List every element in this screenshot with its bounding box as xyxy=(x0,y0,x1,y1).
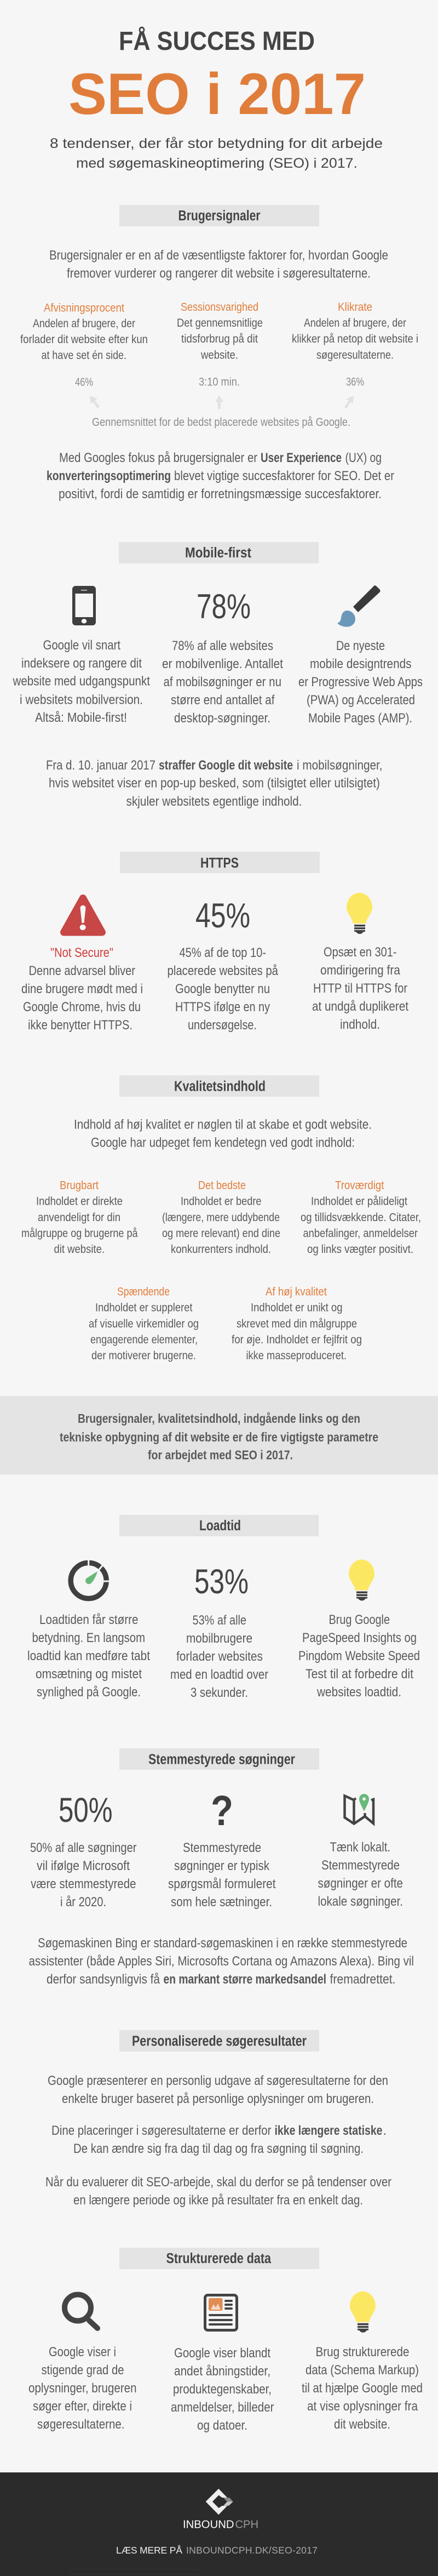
column: design trends: mobile designtrends xyxy=(310,657,412,671)
column: 50% text: i år 2020. xyxy=(60,1895,106,1910)
column: Brugbart xyxy=(21,1178,138,1256)
paragraph: UX: (UX) og xyxy=(345,451,382,465)
icon: warning triangle xyxy=(64,898,102,932)
column: Spændende: af visuelle virkemidler og xyxy=(89,1317,199,1330)
column: search text: oplysninger, brugeren xyxy=(28,2381,137,2396)
paragraph: pop-up: Fra d. 10. januar 2017 xyxy=(46,758,155,773)
value: 46%: 46% xyxy=(75,375,93,389)
icon: paint brush xyxy=(337,585,380,627)
icon: rich result document xyxy=(205,2295,237,2330)
column: 78% text: af mobilsøgninger er nu xyxy=(163,675,281,689)
column: Sessionsvarighed: Det gennemsnitlige xyxy=(177,316,263,329)
column: question text xyxy=(168,1840,276,1910)
paragraph: personlig udgave: Google præsenterer en personlig udgave af søgeresultaterne for den xyxy=(48,2073,388,2088)
column: design trends: (PWA) og Accelerated xyxy=(307,693,415,708)
column: Brugbart: anvendeligt for din xyxy=(38,1211,120,1224)
column: 53% text xyxy=(170,1613,268,1700)
section: Mobile-first xyxy=(13,542,423,809)
column: loadtid text: loadtid kan medføre tabt xyxy=(27,1649,150,1663)
column: 45% text: placerede websites på xyxy=(168,964,279,978)
logo wordmark xyxy=(183,2519,258,2531)
column: Det bedste: og mere relevant) end dine xyxy=(162,1227,280,1240)
column: 53% text: mobilbrugere xyxy=(186,1631,252,1646)
column: Troværdigt: Troværdigt xyxy=(335,1178,384,1192)
heading: Personaliserede søgeresultater: Personaliserede søgeresultater xyxy=(132,2034,307,2049)
column: Sessionsvarighed: tidsforbrug på dit xyxy=(181,332,258,345)
column: rich result text xyxy=(171,2346,274,2433)
icon: question mark: ? xyxy=(211,1787,233,1834)
column: Klikrate xyxy=(292,300,418,362)
icon: map with pin xyxy=(345,1794,373,1824)
paragraph: Bing xyxy=(28,1936,414,1987)
section: Kvalitetsindhold xyxy=(21,1075,421,1362)
column: loadtid text: Loadtiden får større xyxy=(39,1612,138,1627)
column: Google vil snart: indeksere og rangere dit xyxy=(21,656,142,671)
column: search text: søgeresultaterne. xyxy=(37,2417,125,2432)
paragraph: UX: konverteringsoptimering xyxy=(47,469,171,483)
column: Brugbart: Brugbart xyxy=(60,1178,99,1192)
column: 45% text: Google benytter nu xyxy=(175,982,270,996)
column: Troværdigt xyxy=(301,1178,421,1256)
column: 50% text xyxy=(30,1840,137,1910)
heading: HTTPS: HTTPS xyxy=(200,856,239,871)
column: Troværdigt: anbefalinger, anmeldelser xyxy=(303,1227,418,1240)
column: Google vil snart: i websitets mobilversion. xyxy=(20,692,143,707)
logo wordmark: CPH xyxy=(235,2519,258,2531)
column: loadtid text xyxy=(27,1612,150,1700)
heading: Loadtid: Loadtid xyxy=(199,1518,241,1534)
intro text xyxy=(49,248,388,281)
column: 45% text: 45% af de top 10- xyxy=(180,945,266,960)
column: 50% text: vil ifølge Microsoft xyxy=(37,1859,130,1873)
read more link: INBOUNDCPH.DK/SEO-2017 xyxy=(186,2545,318,2556)
column: Not Secure: "Not Secure" xyxy=(50,945,113,960)
arrow: right xyxy=(342,393,357,410)
column: local text: Stemmestyrede xyxy=(321,1858,400,1873)
column: local text xyxy=(318,1840,403,1909)
column: search text xyxy=(28,2345,137,2432)
column: rich result text: produktegenskaber, xyxy=(173,2382,272,2397)
section: Personaliserede søgeresultater xyxy=(45,2030,391,2208)
stat: 78%: 78% xyxy=(197,588,251,626)
column: Klikrate: Klikrate xyxy=(338,300,372,314)
column: Afvisningsprocent xyxy=(20,301,148,362)
paragraph: ikke statiske xyxy=(51,2123,387,2156)
column: 301 redirect: Opsæt en 301- xyxy=(324,945,396,960)
paragraph: pop-up: skjuler websitets egentlige indhold. xyxy=(126,794,302,809)
column: 301 redirect: indhold. xyxy=(340,1017,380,1032)
paragraph: Bing: derfor sandsynligvis få xyxy=(47,1972,160,1987)
column: Klikrate: klikker på netop dit website i xyxy=(292,332,418,345)
column: Af høj kvalitet: Indholdet er unikt og xyxy=(251,1301,343,1314)
column: loadtid text: betydning. En langsom xyxy=(32,1631,145,1645)
paragraph: ikke statiske: ikke længere statiske xyxy=(275,2123,382,2138)
logo mark xyxy=(206,2489,233,2515)
column: local text: Tænk lokalt. xyxy=(330,1840,390,1855)
column: search text: Google viser i xyxy=(49,2345,116,2360)
heading: Strukturerede data xyxy=(119,2248,319,2269)
column: design trends xyxy=(298,639,423,726)
column: 301 redirect xyxy=(312,945,408,1032)
column: Not Secure: dine brugere mødt med i xyxy=(21,982,143,996)
stat: 50%: 50% xyxy=(59,1791,113,1830)
paragraph: pop-up xyxy=(46,758,382,809)
heading: Strukturerede data: Strukturerede data xyxy=(166,2251,272,2266)
column: Det bedste: konkurrenters indhold. xyxy=(171,1243,271,1256)
column: design trends: De nyeste xyxy=(336,639,385,653)
column: Af høj kvalitet: Af høj kvalitet xyxy=(266,1285,327,1298)
paragraph: Bing: en markant større markedsandel xyxy=(163,1972,326,1987)
icon: light bulb xyxy=(350,2292,376,2333)
column: 78% text: er mobilvenlige. Antallet xyxy=(162,657,283,671)
column: 53% text: 3 sekunder. xyxy=(191,1685,248,1700)
column: 45% text: undersøgelse. xyxy=(188,1018,257,1033)
callout band: tekniske opbygning af dit website er de fire vigtigste parametre xyxy=(60,1430,378,1444)
column: Google vil snart xyxy=(13,638,150,725)
intro text: Google har udpeget fem kendetegn ved godt indhold: xyxy=(91,1136,355,1150)
column: Brugbart: Indholdet er direkte xyxy=(36,1195,123,1208)
callout band xyxy=(0,1396,438,1474)
paragraph: UX: blevet vigtige succesfaktorer for SEO. Det er xyxy=(174,469,394,483)
column: Det bedste: (længere, mere uddybende xyxy=(162,1211,280,1224)
intro text: Indhold af høj kvalitet er nøglen til at skabe et godt website. xyxy=(74,1118,372,1132)
paragraph: pop-up: straffer Google dit website xyxy=(159,758,293,773)
paragraph: personlig udgave: enkelte bruger baseret på personlige oplysninger om brugeren. xyxy=(62,2091,374,2106)
logo wordmark: INBOUND xyxy=(183,2519,234,2531)
column: Troværdigt: Indholdet er pålideligt xyxy=(311,1195,407,1208)
column: Klikrate: Andelen af brugere, der xyxy=(304,316,406,329)
paragraph: Bing: fremadrettet. xyxy=(330,1972,395,1987)
column: Troværdigt: og tillidsvækkende. Citater, xyxy=(301,1211,421,1224)
column: question text: spørgsmål formuleret xyxy=(168,1877,276,1891)
column: question text: Stemmestyrede xyxy=(183,1840,261,1855)
column: schema text: Brug strukturerede xyxy=(315,2345,410,2360)
column: Af høj kvalitet xyxy=(232,1285,362,1362)
column: Det bedste xyxy=(162,1178,280,1256)
column: Not Secure: Google Chrome, hvis du xyxy=(23,1000,141,1015)
column: search text: stigende grad de xyxy=(42,2363,124,2378)
column: Spændende: Spændende xyxy=(117,1285,170,1298)
column: schema text xyxy=(302,2345,423,2432)
stat: 53%: 53% xyxy=(194,1563,249,1601)
column: Google vil snart: Google vil snart xyxy=(43,638,120,653)
column: rich result text: andet åbningstider, xyxy=(174,2364,270,2379)
paragraph: UX: positivt, fordi de samtidig er forretningsmæssige succesfaktorer. xyxy=(59,487,382,501)
column: 301 redirect: omdirigering fra xyxy=(320,963,401,978)
arrow: left xyxy=(87,393,102,410)
paragraph: UX: User Experience xyxy=(261,451,342,465)
column: schema text: dit website. xyxy=(334,2417,390,2432)
column: Af høj kvalitet: skrevet med din målgruppe xyxy=(237,1317,357,1330)
column: rich result text: anmeldelser, billeder xyxy=(171,2400,274,2415)
column: 53% text: 53% af alle xyxy=(193,1613,246,1628)
column: 50% text: 50% af alle søgninger xyxy=(30,1840,137,1855)
icon: light bulb xyxy=(349,1560,374,1600)
intro text: Brugersignaler er en af de væsentligste faktorer for, hvordan Google xyxy=(49,248,388,263)
column: Google vil snart: website med udgangspunkt xyxy=(13,674,150,689)
paragraph: tendenser: en længere periode og ikke på resultater fra en enkelt dag. xyxy=(73,2193,363,2208)
column: loadtid text: omsætning og mistet xyxy=(36,1667,142,1682)
column: Not Secure xyxy=(21,945,143,1033)
column: Google vil snart: Altså: Mobile-first! xyxy=(35,710,127,725)
column: Sessionsvarighed: website. xyxy=(200,349,238,362)
paragraph: ikke statiske: . xyxy=(383,2123,387,2138)
paragraph: UX: Med Googles fokus på brugersignaler er xyxy=(59,451,257,465)
value: 36%: 36% xyxy=(346,375,364,388)
subtitle: med søgemaskineoptimering (SEO) i 2017. xyxy=(76,156,358,171)
column: 78% text: 78% af alle websites xyxy=(172,639,273,653)
read more link: LÆS MERE PÅ xyxy=(116,2545,182,2556)
column: Brugbart: dit website. xyxy=(54,1243,105,1256)
column: Sessionsvarighed xyxy=(177,300,263,362)
column: 53% text: forlader websites xyxy=(176,1649,263,1664)
heading: Mobile-first xyxy=(119,542,319,563)
heading: Brugersignaler: Brugersignaler xyxy=(178,208,261,224)
column: local text: lokale søgninger. xyxy=(318,1894,403,1909)
paragraph: ikke statiske: Dine placeringer i søgeresultaterne er derfor xyxy=(51,2123,272,2138)
stat: 45%: 45% xyxy=(195,897,250,935)
arrow: middle xyxy=(215,395,223,409)
heading: Mobile-first: Mobile-first xyxy=(185,545,251,561)
column: 78% text: større end antallet af xyxy=(171,693,275,708)
column: rich result text: og datoer. xyxy=(197,2418,247,2433)
column: 78% text xyxy=(162,639,283,726)
column: 78% text: desktop-søgninger. xyxy=(174,711,270,726)
column: Spændende: Indholdet er suppleret xyxy=(95,1301,193,1314)
callout band: Brugersignaler, kvalitetsindhold, indgående links og den xyxy=(78,1411,360,1426)
icon: speed gauge xyxy=(71,1559,111,1598)
column: tools text: PageSpeed Insights og xyxy=(302,1631,417,1645)
column: tools text xyxy=(298,1612,420,1700)
column: Af høj kvalitet: ikke masseproduceret. xyxy=(246,1349,347,1362)
column: tools text: websites loadtid. xyxy=(316,1685,401,1700)
heading: Loadtid xyxy=(119,1515,319,1536)
subtitle xyxy=(50,136,383,171)
column: Not Secure: Denne advarsel bliver xyxy=(28,964,135,978)
paragraph: UX xyxy=(47,451,394,501)
heading: Personaliserede søgeresultater xyxy=(119,2030,319,2051)
column: Afvisningsprocent: at have set én side. xyxy=(42,349,126,362)
column: question text: som hele sætninger. xyxy=(171,1895,272,1910)
column: Sessionsvarighed: Sessionsvarighed xyxy=(181,300,258,314)
section: Stemmestyrede søgninger xyxy=(28,1748,414,1987)
column: question text: søgninger er typisk xyxy=(174,1859,270,1873)
heading: Brugersignaler xyxy=(119,205,319,226)
column: schema text: data (Schema Markup) xyxy=(306,2363,419,2378)
heading: Kvalitetsindhold: Kvalitetsindhold xyxy=(174,1079,266,1095)
section: Loadtid xyxy=(27,1515,420,1700)
icon: magnifying glass xyxy=(65,2294,97,2328)
column: tools text: Test til at forbedre dit xyxy=(306,1667,413,1682)
column: Det bedste: Det bedste xyxy=(198,1178,246,1192)
callout band: for arbejdet med SEO i 2017. xyxy=(148,1447,293,1462)
column: design trends: Mobile Pages (AMP). xyxy=(308,711,412,726)
icon: smartphone xyxy=(72,586,96,625)
column: Spændende: engagerende elementer, xyxy=(90,1333,198,1346)
column: Brugbart: målgruppe og brugerne på xyxy=(21,1227,138,1240)
paragraph: pop-up: i mobilsøgninger, xyxy=(297,758,382,773)
column: 301 redirect: at undgå duplikeret xyxy=(312,999,408,1014)
column: tools text: Brug Google xyxy=(328,1612,390,1627)
column: 301 redirect: HTTP til HTTPS for xyxy=(313,981,407,996)
column: 53% text: med en loadtid over xyxy=(170,1667,268,1682)
column: rich result text: Google viser blandt xyxy=(174,2346,270,2361)
heading: Stemmestyrede søgninger: Stemmestyrede søgninger xyxy=(148,1752,295,1767)
section: Brugersignaler xyxy=(20,205,418,501)
section: Strukturerede data xyxy=(28,2248,423,2433)
column: Det bedste: Indholdet er bedre xyxy=(181,1195,262,1208)
title line: SEO i 2017: SEO i 2017 xyxy=(68,61,366,127)
column: local text: søgninger er ofte xyxy=(318,1876,403,1891)
column: Afvisningsprocent: Andelen af brugere, der xyxy=(33,317,135,330)
value: 3:10 min.: 3:10 min. xyxy=(199,375,240,388)
read more link xyxy=(116,2545,318,2556)
column: 45% text: HTTPS ifølge en ny xyxy=(175,1000,270,1015)
caption: Gennemsnittet for de bedst placerede websites på Google. xyxy=(92,415,350,429)
heading: Kvalitetsindhold xyxy=(119,1075,319,1097)
header xyxy=(50,26,383,171)
subtitle: 8 tendenser, der får stor betydning for dit arbejde xyxy=(50,136,383,151)
intro text xyxy=(74,1118,372,1150)
paragraph: personlig udgave xyxy=(48,2073,388,2106)
column: Af høj kvalitet: for øje. Indholdet er fejlfrit og xyxy=(232,1333,362,1346)
column: Not Secure: ikke benytter HTTPS. xyxy=(28,1018,132,1033)
title line: FÅ SUCCES MED: FÅ SUCCES MED xyxy=(119,26,315,56)
column: 50% text: være stemmestyrede xyxy=(31,1877,136,1891)
column: Troværdigt: og links vægter positivt. xyxy=(307,1243,413,1256)
column: Afvisningsprocent: forlader dit website efter kun xyxy=(20,333,148,346)
column: Spændende xyxy=(89,1285,199,1362)
icon: light bulb xyxy=(347,893,372,934)
column: Klikrate: søgeresultaterne. xyxy=(316,349,394,362)
column: Spændende: der motiverer brugerne. xyxy=(91,1349,196,1362)
paragraph: pop-up: hvis websitet viser en pop-up besked, som (tilsigtet eller utilsigtet) xyxy=(49,776,380,791)
column: Afvisningsprocent: Afvisningsprocent xyxy=(44,301,124,314)
heading: HTTPS xyxy=(120,852,320,873)
paragraph: ikke statiske: De kan ændre sig fra dag til dag og fra søgning til søgning. xyxy=(73,2141,364,2156)
column: loadtid text: synlighed på Google. xyxy=(37,1685,141,1700)
footer xyxy=(0,2472,438,2576)
paragraph: tendenser xyxy=(45,2175,391,2208)
column: schema text: at vise oplysninger fra xyxy=(307,2399,418,2414)
heading: Stemmestyrede søgninger xyxy=(119,1748,319,1770)
column: 45% text xyxy=(168,945,279,1033)
intro text: fremover vurderer og rangerer dit website i søgeresultaterne. xyxy=(67,266,371,281)
column: search text: søger efter, direkte i xyxy=(33,2399,132,2414)
section: HTTPS xyxy=(21,852,408,1033)
